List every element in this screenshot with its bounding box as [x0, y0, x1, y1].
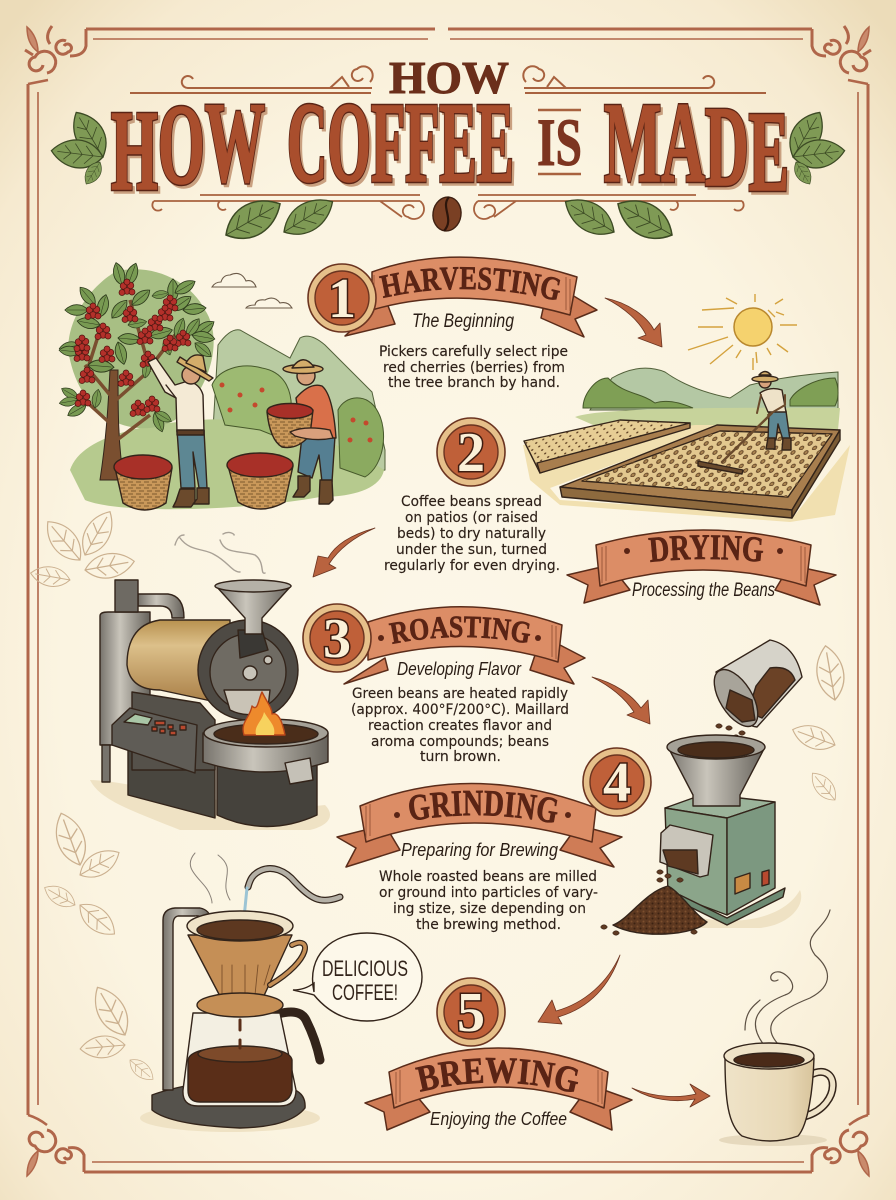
decorative line leaves: bottom [79, 981, 158, 1085]
icon: sun [688, 294, 797, 370]
chute [660, 825, 713, 877]
description: turn brown. [420, 749, 501, 765]
description: ing stize, size depending on [393, 901, 586, 917]
glass carafe [183, 1013, 296, 1106]
flourish: heading right [523, 66, 766, 93]
hills and meadow [210, 330, 385, 480]
kettle spout and water [243, 868, 340, 928]
description: on patios (or raised [405, 510, 538, 526]
ribbon dots [378, 635, 541, 641]
stand [163, 908, 211, 1090]
steam [745, 910, 830, 1045]
scattered grounds [601, 870, 697, 935]
title leaves left [50, 105, 115, 188]
flourish: heading left [130, 66, 373, 93]
main title: COFFEE [287, 79, 514, 206]
corner flourish: top right [825, 26, 871, 73]
scene: pour-over brewer [140, 853, 340, 1132]
decorative line leaves: lower left [40, 809, 124, 942]
ribbon [345, 257, 597, 337]
main title: MADE [604, 79, 789, 215]
description: Coffee beans spread [401, 494, 542, 510]
heading: BREWING [415, 1058, 578, 1092]
main title: MADE [604, 79, 789, 215]
description: or ground into particles of vary- [379, 885, 598, 901]
hopper [668, 738, 765, 806]
heading: ROASTING [388, 616, 530, 644]
badge 5 [437, 978, 505, 1046]
main title: HOW [111, 79, 265, 214]
drying bed right [560, 425, 840, 518]
step 2 badge and text [384, 418, 560, 574]
ground shadow [140, 1104, 320, 1132]
corner flourish: top left [25, 26, 71, 73]
description: the brewing method. [416, 917, 561, 933]
dripper saucer [197, 993, 283, 1017]
description: Whole roasted beans are milled [379, 869, 597, 885]
main title: COFFEE [290, 82, 516, 209]
brass drum [127, 620, 230, 705]
description [351, 686, 569, 765]
heading: GRINDING [409, 790, 558, 823]
badge 2 [437, 418, 505, 486]
heading: DRYING [648, 535, 764, 562]
description: the tree branch by hand. [388, 375, 560, 391]
carafe handle [278, 1012, 320, 1060]
scene: grinder [601, 640, 802, 935]
step 4 banner [336, 747, 652, 933]
icon: coffee bean [431, 195, 463, 233]
ground coffee pile [613, 886, 707, 934]
cooling tray [203, 733, 328, 772]
corner flourish: bottom right [825, 1130, 869, 1176]
picker one [148, 355, 213, 507]
badge 3 [303, 604, 371, 672]
heading: HARVESTING [378, 266, 560, 300]
decorative line leaves: upper left [29, 506, 136, 589]
scene: drying illustration [523, 294, 850, 522]
speech bubble: DELICIOUS [322, 956, 408, 981]
drips [238, 1020, 242, 1048]
description: beds) to dry naturally [397, 526, 546, 542]
ribbon [337, 783, 622, 867]
arrow: grinding to brewing [538, 955, 620, 1024]
arrow: drying to roasting [313, 528, 375, 577]
main title [111, 79, 791, 218]
ribbon dots [624, 548, 783, 554]
badge 4: 4 [603, 752, 631, 814]
corner flourish: bottom left [27, 1130, 71, 1176]
badge 1 [308, 264, 376, 332]
baskets of cherries [114, 453, 293, 510]
decorative line leaves: right [789, 644, 848, 805]
ground shadow [690, 890, 801, 928]
step 1 banner [307, 256, 598, 391]
subtitle: Preparing for Brewing [401, 840, 558, 860]
chimney [100, 612, 150, 745]
falling beans [716, 724, 745, 739]
description [379, 869, 598, 933]
control panel [112, 708, 197, 773]
arrow: roasting to grinding [592, 677, 650, 724]
steam [175, 532, 265, 573]
small heading: HOW: HOW [389, 52, 509, 103]
description [384, 494, 560, 574]
arrow: brewing to cup [632, 1084, 710, 1107]
cup body [725, 1058, 814, 1141]
subtitle: Developing Flavor [397, 659, 522, 679]
drum face [198, 620, 298, 720]
description: reaction creates flavor and [368, 718, 552, 734]
speech bubble [293, 933, 422, 1021]
tilted cup of beans [705, 640, 802, 734]
subtitle: Processing the Beans [632, 580, 775, 601]
scene: roasting machine [90, 532, 330, 830]
badge 3: 3 [323, 608, 351, 670]
lower leaves [218, 190, 680, 249]
subtitle: Enjoying the Coffee [430, 1109, 567, 1129]
step 2 banner [566, 529, 837, 606]
icon: clouds [212, 273, 292, 308]
scene: coffee cup [719, 910, 833, 1146]
main title: HOW [114, 82, 268, 217]
scene: harvesting illustration [58, 261, 385, 510]
dripper cone [188, 935, 292, 1000]
funnel hopper [216, 586, 291, 634]
picker two [267, 360, 336, 504]
worker with rake [698, 372, 791, 474]
tray lower [217, 760, 317, 826]
stand base [152, 1085, 305, 1128]
badge 4 [583, 748, 651, 816]
badge 2: 2 [457, 422, 485, 484]
badge 5: 5 [457, 982, 485, 1044]
description: Green beans are heated rapidly [352, 686, 568, 702]
saucer shadow [719, 1134, 827, 1146]
speech bubble: COFFEE! [332, 980, 398, 1005]
lower flourish [152, 195, 744, 219]
base [128, 750, 215, 818]
description: red cherries (berries) from [383, 360, 565, 376]
ribbon dots [394, 812, 571, 818]
ground shadow [90, 780, 330, 830]
arrow: harvesting to drying [605, 298, 662, 347]
handle [806, 1072, 833, 1116]
step 5 banner [364, 977, 633, 1131]
description: aroma compounds; beans [371, 734, 549, 750]
flame [243, 692, 285, 735]
description: regularly for even drying. [384, 558, 560, 574]
drying bed left [524, 420, 690, 473]
badge 1: 1 [328, 268, 356, 330]
main title: MADE [606, 82, 791, 218]
main title: COFFEE [287, 79, 514, 206]
main title: HOW [111, 79, 265, 214]
description [379, 344, 568, 391]
description: Pickers carefully select ripe [379, 344, 568, 360]
main title: IS [537, 104, 582, 180]
green grinder body [665, 798, 775, 818]
ribbon [567, 530, 836, 605]
ribbon [365, 1048, 632, 1130]
title block [50, 52, 846, 249]
steam [190, 853, 230, 903]
description: under the sun, turned [396, 542, 547, 558]
subtitle: The Beginning [412, 311, 514, 332]
step 3 banner [302, 603, 586, 765]
hills [590, 368, 838, 410]
coffee tree [58, 261, 217, 480]
ribbon [344, 607, 585, 684]
title leaves right [781, 105, 846, 188]
drum body plate [132, 692, 215, 770]
description: (approx. 400°F/200°C). Maillard [351, 702, 569, 718]
